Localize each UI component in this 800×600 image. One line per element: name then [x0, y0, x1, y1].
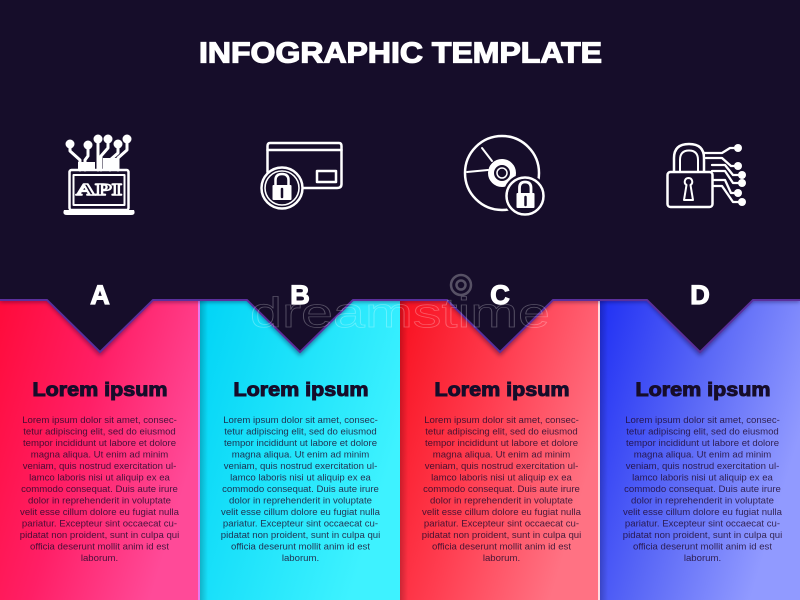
body text B: dolor in reprehenderit in voluptate	[229, 496, 372, 506]
panel B	[200, 300, 400, 600]
body text D: Lorem ipsum dolor sit amet, consec-	[625, 415, 780, 426]
notched top edge	[0, 270, 800, 352]
panel A heading: Lorem ipsum	[32, 379, 168, 401]
body text B: commodo consequat. Duis aute irure	[222, 484, 379, 495]
step letter B: B	[290, 280, 310, 310]
body text A: lamco laboris nisi ut aliquip ex ea	[29, 472, 171, 484]
body text D: pidatat non proident, sunt in culpa qui	[623, 530, 782, 541]
body text B: pidatat non proident, sunt in culpa qui	[221, 530, 380, 541]
watermark: dreamstime	[250, 289, 550, 336]
body text B: pariatur. Excepteur sint occaecat cu-	[223, 518, 378, 530]
body text C: tempor incididunt ut labore et dolore	[425, 438, 578, 449]
body text A	[20, 415, 180, 564]
body text B	[221, 415, 381, 564]
icon: compact disc with lock	[465, 136, 547, 218]
body text D: tetur adipiscing elit, sed do eiusmod	[626, 426, 779, 438]
body text C: laborum.	[483, 553, 520, 564]
body text B: velit esse cillum dolore eu fugiat nulla	[221, 507, 381, 518]
step letter A: A	[90, 280, 110, 310]
step letter C: C	[490, 280, 510, 310]
body text B: lamco laboris nisi ut aliquip ex ea	[230, 472, 372, 484]
panel D	[598, 300, 800, 600]
body text A: veniam, quis nostrud exercitation ul-	[23, 461, 176, 472]
body text B: tetur adipiscing elit, sed do eiusmod	[224, 426, 377, 438]
panel C heading: Lorem ipsum	[434, 379, 570, 401]
body text B: Lorem ipsum dolor sit amet, consec-	[223, 415, 378, 426]
body text A: tetur adipiscing elit, sed do eiusmod	[23, 426, 176, 438]
body text D: veniam, quis nostrud exercitation ul-	[626, 461, 779, 472]
body text D	[623, 415, 783, 564]
panel B heading: Lorem ipsum	[234, 379, 368, 401]
body text D: lamco laboris nisi ut aliquip ex ea	[632, 472, 774, 484]
body text C	[422, 415, 582, 564]
icon: credit card with lock	[262, 143, 342, 208]
body text A: pariatur. Excepteur sint occaecat cu-	[22, 518, 177, 530]
panel A	[0, 300, 200, 600]
body text A: laborum.	[81, 553, 118, 564]
body text D: commodo consequat. Duis aute irure	[624, 484, 781, 495]
icon: API laptop with circuits	[63, 134, 135, 215]
body text A: velit esse cillum dolore eu fugiat nulla	[20, 507, 180, 518]
body text D: laborum.	[684, 553, 721, 564]
body text D: officia deserunt mollit anim id est	[633, 542, 772, 552]
body text C: officia deserunt mollit anim id est	[432, 542, 571, 552]
notch shadow	[0, 290, 800, 356]
body text B: officia deserunt mollit anim id est	[231, 542, 370, 552]
body text D: tempor incididunt ut labore et dolore	[626, 438, 779, 449]
body text D: velit esse cillum dolore eu fugiat nulla	[623, 507, 783, 518]
body text B: laborum.	[282, 553, 319, 564]
body text D: pariatur. Excepteur sint occaecat cu-	[625, 518, 780, 530]
body text A: commodo consequat. Duis aute irure	[21, 484, 178, 495]
body text A: Lorem ipsum dolor sit amet, consec-	[22, 415, 177, 426]
body text A: dolor in reprehenderit in voluptate	[28, 496, 171, 506]
body text C: lamco laboris nisi ut aliquip ex ea	[431, 472, 573, 484]
body text A: pidatat non proident, sunt in culpa qui	[20, 530, 179, 541]
body text C: tetur adipiscing elit, sed do eiusmod	[425, 426, 578, 438]
body text C: magna aliqua. Ut enim ad minim	[433, 450, 570, 460]
panel D heading: Lorem ipsum	[636, 379, 770, 401]
body text C: veniam, quis nostrud exercitation ul-	[425, 461, 578, 472]
body text C: pidatat non proident, sunt in culpa qui	[422, 530, 581, 541]
body text B: magna aliqua. Ut enim ad minim	[232, 450, 369, 460]
body text B: tempor incididunt ut labore et dolore	[224, 438, 377, 449]
body text C: pariatur. Excepteur sint occaecat cu-	[424, 518, 579, 530]
step letter D: D	[690, 280, 710, 310]
icon: padlock with circuits	[668, 144, 746, 207]
body text C: dolor in reprehenderit in voluptate	[430, 496, 573, 506]
watermark	[250, 275, 550, 336]
body text A: officia deserunt mollit anim id est	[30, 542, 169, 552]
body text D: dolor in reprehenderit in voluptate	[631, 496, 774, 506]
body text C: Lorem ipsum dolor sit amet, consec-	[424, 415, 579, 426]
body text A: tempor incididunt ut labore et dolore	[23, 438, 176, 449]
title: INFOGRAPHIC TEMPLATE	[199, 38, 602, 70]
body text A: magna aliqua. Ut enim ad minim	[31, 450, 168, 460]
body text C: commodo consequat. Duis aute irure	[423, 484, 580, 495]
panel C	[400, 300, 600, 600]
icon: API laptop with circuits: API	[76, 180, 123, 199]
body text B: veniam, quis nostrud exercitation ul-	[224, 461, 377, 472]
body text C: velit esse cillum dolore eu fugiat nulla	[422, 507, 582, 518]
body text D: magna aliqua. Ut enim ad minim	[634, 450, 771, 460]
